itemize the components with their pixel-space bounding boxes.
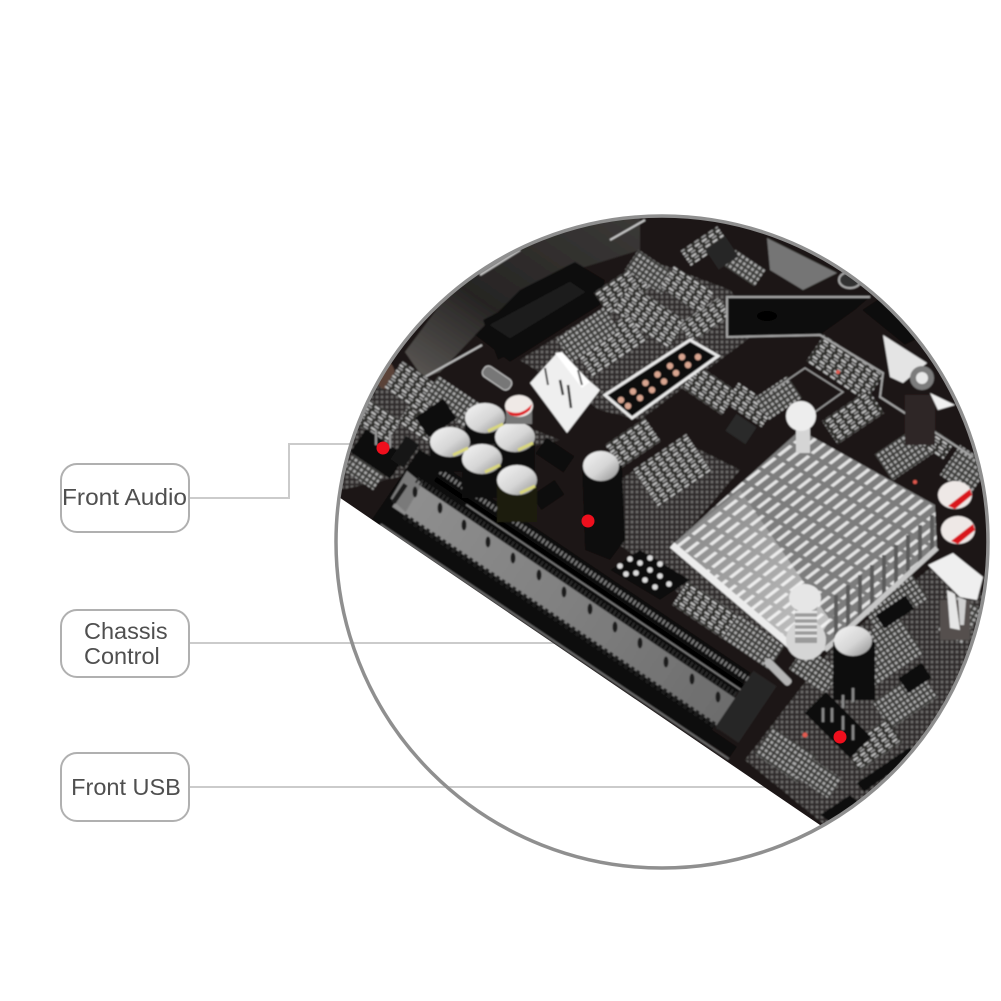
upper contact row (440, 472, 751, 681)
tall capacitor lower right (833, 626, 875, 700)
trace outline with mounting plate (727, 297, 973, 457)
label: Chassis Control: Chassis (84, 618, 168, 644)
front USB pin header (805, 688, 915, 825)
label: Front USB: Front USB (71, 774, 181, 800)
second contact row (417, 480, 740, 698)
upper-left I/O shroud and black connector (375, 216, 645, 389)
short capacitors group (430, 403, 537, 522)
label: Front Audio (61, 464, 189, 532)
heatsink standoff: top (786, 401, 816, 453)
crystal near slot end (763, 657, 793, 687)
lower-left glow on fins (676, 490, 830, 638)
slot grey body (392, 479, 738, 728)
front audio pin header (350, 429, 419, 479)
grey metal block (767, 238, 837, 290)
heatsink (672, 430, 937, 657)
red marker: chassis control (582, 514, 594, 528)
slot rails (372, 449, 751, 743)
label: Chassis Control (61, 610, 189, 677)
circle outline (336, 216, 988, 868)
label: Front Audio: Front Audio (62, 484, 187, 510)
rail highlight (466, 505, 744, 692)
surface-mount component clusters (343, 226, 990, 798)
small connector at top (839, 272, 925, 345)
right-side fin faces (836, 515, 932, 642)
crystal oscillator (480, 364, 514, 392)
white screw bracket (883, 335, 955, 445)
red-striped capacitors (505, 395, 975, 544)
slot end block (715, 671, 777, 743)
lower contact row (404, 516, 719, 728)
label: Chassis Control: Control (84, 643, 160, 669)
label: Front USB (61, 753, 189, 821)
white connector right (928, 553, 983, 640)
white four-pin fan connector (530, 352, 600, 433)
connector line: Chassis Control (189, 642, 556, 644)
red marker: front USB (834, 730, 846, 744)
red marker: front audio (376, 442, 390, 454)
bottom black rail (704, 730, 736, 757)
circular magnified motherboard photo (340, 218, 986, 825)
twelve-pin header panel (605, 340, 718, 418)
slot notches (412, 486, 720, 702)
board texture base (340, 260, 990, 825)
centre rail (435, 479, 746, 689)
connector line: Front Audio (189, 444, 352, 498)
tall capacitor near slot (582, 451, 625, 560)
dark chips (415, 236, 932, 693)
small red SMD markers (802, 370, 917, 738)
heatsink standoff: bottom (786, 584, 826, 660)
eight-pin header with white pads (610, 550, 690, 600)
connector line: Front USB (189, 786, 772, 788)
PCI Express slot (372, 446, 777, 760)
